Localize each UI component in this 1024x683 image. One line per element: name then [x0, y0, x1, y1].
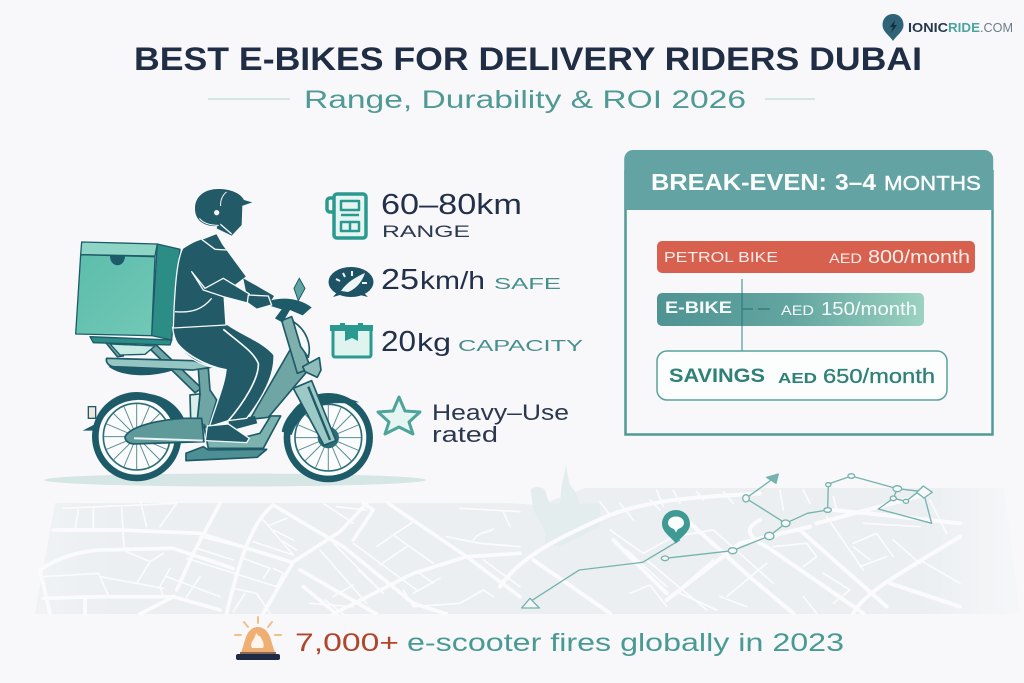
icon: battery [327, 194, 366, 238]
box: savings: 650/month [823, 366, 935, 388]
panel: break-even: MONTHS [884, 173, 981, 195]
skyline [531, 465, 600, 546]
map pin [662, 510, 690, 544]
feature: range: 60–80km [381, 189, 522, 221]
shield [293, 322, 309, 357]
footer callout: fire statistic [235, 617, 844, 660]
feature: speed [328, 264, 561, 297]
feature: capacity: kg [417, 329, 451, 357]
connector [741, 279, 743, 351]
glove [247, 295, 272, 309]
fork [293, 381, 336, 445]
footboard [204, 416, 281, 448]
map roads left [40, 500, 520, 614]
bar: e-bike: 150/month [821, 299, 917, 319]
feature: capacity: 20 [381, 326, 416, 358]
front wheel [287, 396, 370, 479]
title: BEST E-BIKES FOR DELIVERY RIDERS DUBAI [134, 41, 922, 77]
rack struts and seat post [146, 342, 202, 393]
panel: break-even [624, 150, 993, 434]
handlebar [270, 299, 312, 323]
feature: capacity: CAPACITY [458, 338, 584, 355]
shoe [205, 424, 249, 443]
bar: petrol bike [657, 241, 975, 273]
fenders [83, 393, 184, 431]
helmet [195, 189, 252, 226]
torso [173, 233, 247, 328]
icon: cargo box [330, 323, 373, 357]
feature: speed: SAFE [494, 276, 561, 293]
bar: petrol bike: PETROL BIKE [664, 249, 778, 266]
feature: capacity [330, 323, 584, 358]
rack plate [110, 366, 172, 374]
head [217, 206, 242, 236]
subtitle: Range, Durability & ROI 2026 [304, 86, 746, 114]
ground shadow [44, 474, 426, 486]
box: savings [657, 351, 947, 400]
footer callout: fire statistic: e-scooter fires globally in 2023 [407, 629, 844, 657]
feature: heavy use: Heavy–Use [432, 400, 569, 425]
far arm [243, 278, 274, 303]
map background [35, 465, 1020, 614]
bar: petrol bike: 800/month [868, 247, 970, 267]
bar: petrol bike: AED [829, 250, 862, 266]
delivery box [76, 242, 180, 355]
headlight [303, 358, 321, 377]
rear body [125, 418, 204, 444]
logo: IonicRide: IONIC [908, 20, 949, 35]
logo: IonicRide [882, 14, 1013, 41]
bar: e-bike: E-BIKE [665, 298, 732, 317]
feature: speed: km/h [420, 267, 485, 295]
frame [105, 317, 336, 461]
panel header [624, 150, 993, 210]
panel: break-even: 3–4 [835, 169, 876, 195]
route line [522, 474, 932, 608]
rear wheel [95, 395, 178, 478]
feature: range: RANGE [382, 222, 470, 241]
icon: alarm with flame [235, 617, 281, 660]
footer callout: fire statistic: 7,000+ [295, 629, 399, 657]
feature: speed: 25 [381, 264, 419, 296]
near arm [192, 272, 249, 303]
icon: star [378, 397, 420, 434]
box: savings: AED [778, 370, 817, 387]
feature: heavy use [378, 397, 569, 447]
feature: heavy use: rated [432, 422, 498, 447]
trousers [173, 324, 274, 427]
icon: speedometer [328, 267, 374, 297]
far foot [228, 416, 257, 431]
logo: IonicRide: .COM [980, 20, 1013, 35]
box: savings: SAVINGS [669, 366, 765, 387]
bar: e-bike: AED [781, 302, 814, 318]
bar: e-bike [657, 293, 924, 326]
map roads right [500, 490, 960, 613]
head tube [282, 317, 311, 373]
logo: IonicRide: RIDE [948, 20, 980, 35]
rider [173, 189, 274, 443]
feature: range [327, 189, 522, 241]
down tube [250, 350, 308, 419]
heading: BREAK-EVEN: [651, 169, 827, 195]
illustration: delivery rider on e-bike [76, 189, 370, 479]
